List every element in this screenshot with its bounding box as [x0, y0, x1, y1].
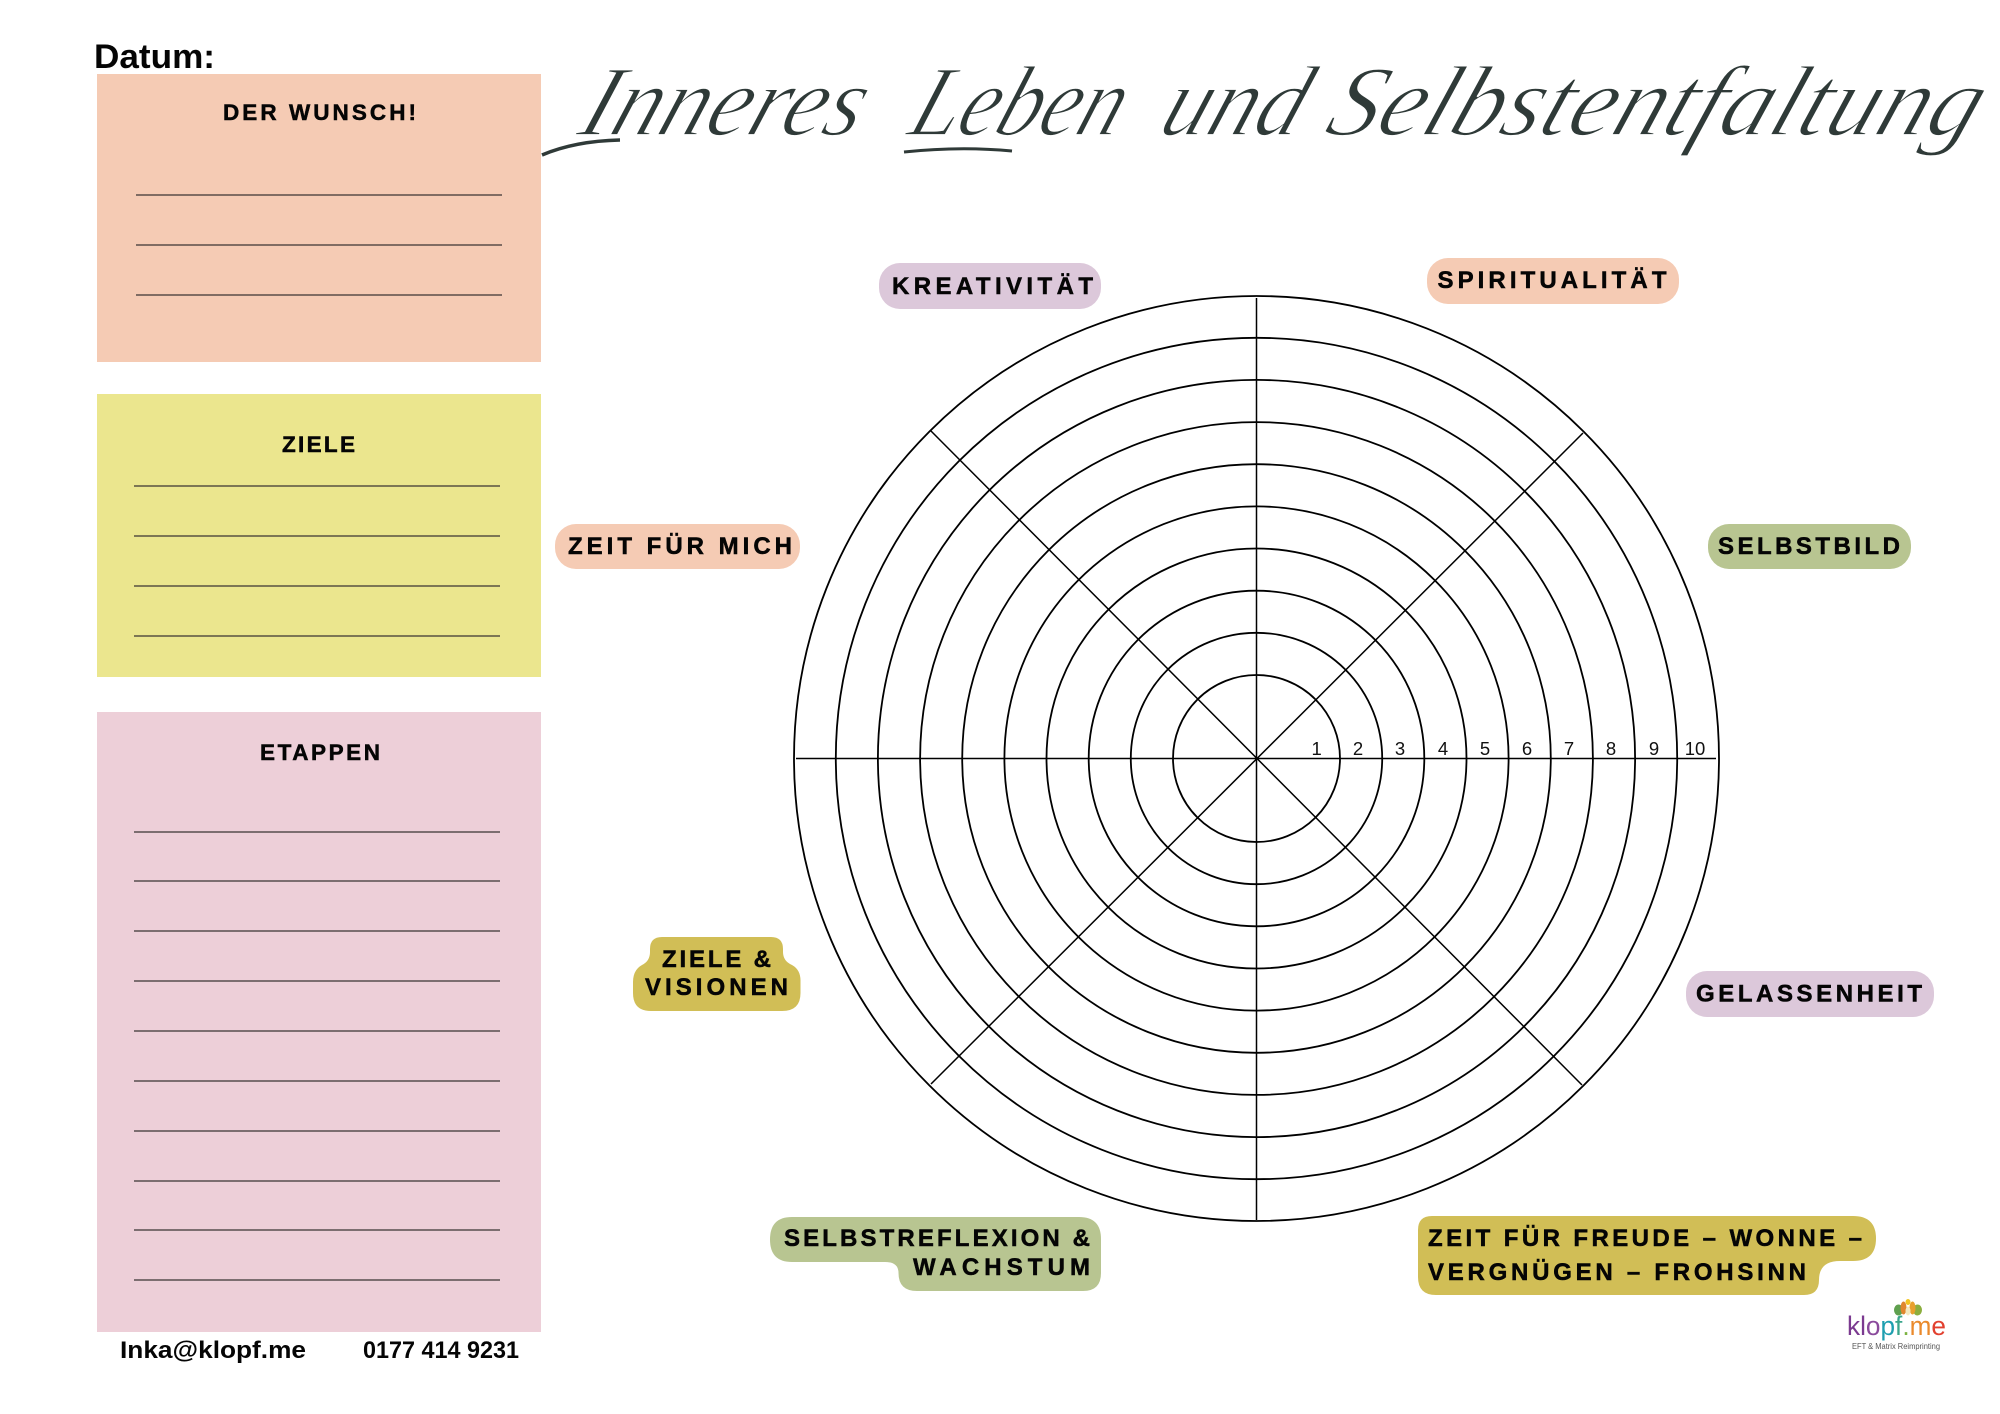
writing lines [134, 832, 500, 1280]
heading: der wunsch: DER WUNSCH! [223, 100, 416, 125]
logo wordmark: klopf.me [1847, 1311, 1946, 1341]
scale numbers: 3 [1395, 738, 1405, 759]
scale numbers: 1 [1312, 738, 1322, 759]
label: ziele und visionen: ZIELE & [662, 946, 771, 973]
writing lines [134, 486, 500, 636]
label: kreativität: KREATIVITÄT [892, 273, 1093, 300]
label: zeit für mich: ZEIT FÜR MICH [568, 533, 792, 560]
panel: der wunsch [97, 74, 541, 362]
label: spiritualität [1427, 258, 1679, 304]
label: ziele und visionen: VISIONEN [645, 974, 788, 1001]
scale numbers: 6 [1522, 738, 1532, 759]
wheel chart [794, 296, 1719, 1221]
label: kreativität [879, 263, 1101, 309]
label: ziele und visionen [633, 937, 801, 1011]
label: zeit für freude: ZEIT FÜR FREUDE – WONNE – [1428, 1225, 1862, 1252]
scale numbers: 10 [1685, 738, 1705, 759]
title: Leben [895, 47, 1147, 157]
scale numbers: 2 [1353, 738, 1363, 759]
label: zeit für mich [555, 524, 800, 569]
panel: ziele [97, 394, 541, 677]
panel: etappen [97, 712, 541, 1332]
scale numbers: 5 [1480, 738, 1490, 759]
label: selbstreflexion und wachstum [770, 1217, 1101, 1291]
label: zeit für freude: VERGNÜGEN – FROHSINN [1428, 1259, 1806, 1286]
rings [794, 296, 1719, 1221]
label: selbstreflexion und wachstum: SELBSTREFLEXION & [784, 1225, 1090, 1252]
label: gelassenheit: GELASSENHEIT [1696, 980, 1922, 1008]
label: spiritualität: SPIRITUALITÄT [1438, 267, 1667, 294]
title: Inneres [566, 47, 887, 157]
title: Selbstentfaltung [1314, 47, 2000, 157]
icon: lotus [1894, 1299, 1922, 1316]
label: gelassenheit [1686, 971, 1934, 1017]
date label: Datum: [94, 38, 215, 76]
contact: email: Inka@klopf.me [120, 1337, 306, 1364]
scale numbers: 4 [1438, 738, 1448, 759]
scale numbers [1312, 738, 1705, 759]
title [542, 47, 2000, 157]
writing lines [136, 195, 502, 295]
label: selbstbild: SELBSTBILD [1718, 533, 1900, 560]
label: zeit für freude [1418, 1216, 1876, 1295]
scale numbers: 8 [1606, 738, 1616, 759]
scale numbers: 9 [1649, 738, 1659, 759]
logo: klopf.me [1847, 1299, 1946, 1351]
title: und [1148, 47, 1329, 157]
scale numbers: 7 [1564, 738, 1574, 759]
spokes [796, 298, 1716, 1220]
label: selbstreflexion und wachstum: WACHSTUM [913, 1254, 1090, 1281]
label: selbstbild [1708, 524, 1911, 569]
heading: ziele: ZIELE [282, 432, 355, 457]
contact: phone: 0177 414 9231 [363, 1337, 519, 1364]
heading: etappen: ETAPPEN [260, 740, 380, 765]
logo tagline: EFT & Matrix Reimprinting [1852, 1341, 1940, 1351]
